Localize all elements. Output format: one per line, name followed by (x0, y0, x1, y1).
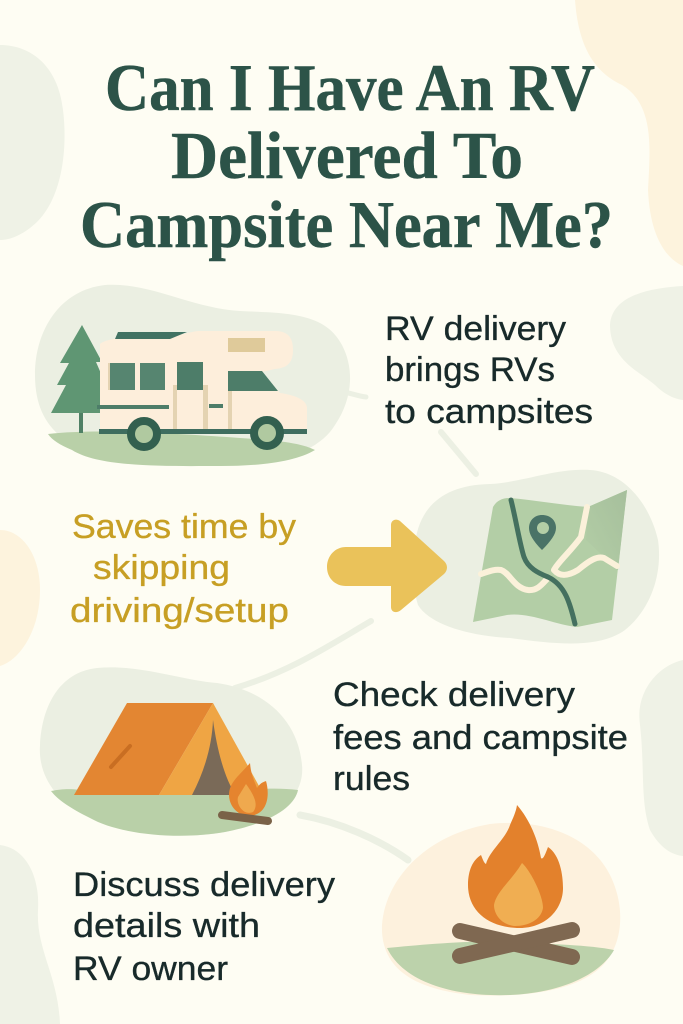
pale roads (481, 507, 617, 590)
title: Campsite Near Me? (80, 188, 613, 262)
ground (48, 431, 315, 466)
map sheet (473, 490, 627, 627)
map fold (586, 490, 627, 570)
campfire backdrop blob (382, 823, 620, 996)
windows (110, 363, 135, 390)
connector strokes (235, 391, 476, 860)
body text: RV delivery (385, 310, 593, 431)
illustration: campfire (382, 805, 620, 996)
body text: saves time: skipping (93, 549, 230, 587)
illustration: map (413, 470, 659, 643)
door and trim (108, 363, 232, 432)
title: Delivered To (171, 119, 523, 193)
wheels (131, 420, 280, 447)
body text: check fees: fees and campsite (333, 719, 628, 757)
chassis (99, 429, 307, 434)
body text: discuss: RV owner (73, 950, 228, 988)
ground (51, 789, 298, 836)
illustration: tent (40, 667, 302, 836)
river (511, 500, 575, 624)
ground (387, 942, 614, 995)
body text: discuss: Discuss delivery (73, 866, 335, 904)
flame (468, 805, 563, 928)
roof panel (228, 338, 265, 352)
illustration: RV (35, 285, 350, 466)
tent seam (111, 746, 130, 767)
tent side (74, 703, 213, 795)
small campfire (222, 763, 268, 821)
tree (51, 325, 106, 433)
RV body (100, 331, 307, 430)
arrow (327, 520, 447, 612)
inner flame (494, 863, 543, 926)
roof visor (115, 332, 187, 339)
map pin (529, 515, 556, 550)
RV backdrop blob (35, 285, 350, 466)
body text: RV delivery: to campsites (385, 393, 593, 431)
body text: saves time: Saves time by (72, 508, 296, 546)
title (80, 51, 613, 262)
body text: check fees (333, 676, 628, 798)
body text: check fees: rules (333, 760, 410, 798)
tent backdrop blob (40, 667, 302, 836)
body text: RV delivery: RV delivery (385, 310, 566, 348)
body text: discuss: details with (73, 907, 260, 945)
body text: saves time (70, 508, 296, 630)
map backdrop blob (413, 470, 659, 643)
body text: RV delivery: brings RVs (385, 351, 555, 389)
title: Can I Have An RV (105, 51, 595, 125)
body text: discuss (73, 866, 335, 988)
tent door (192, 720, 236, 795)
logs (460, 930, 572, 957)
body text: check fees: Check delivery (333, 676, 575, 714)
body text: saves time: driving/setup (70, 592, 289, 630)
tent front (159, 703, 264, 795)
